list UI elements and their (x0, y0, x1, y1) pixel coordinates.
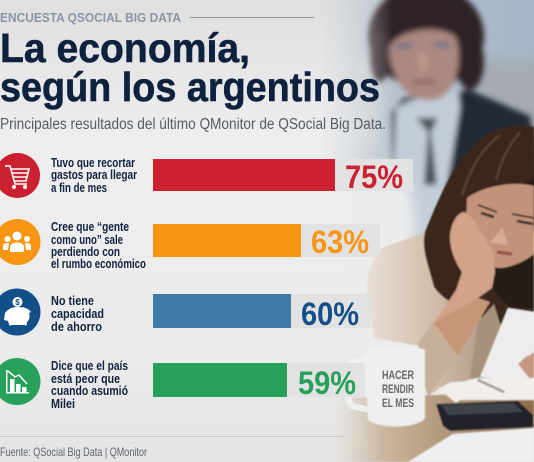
row 1: recortar gastos (0, 153, 413, 198)
row 3: sin ahorro (0, 288, 370, 336)
photo: blurred man in suit (336, 0, 534, 237)
icon: piggy bank: $ (15, 298, 20, 307)
label: gastos para llegar (51, 167, 137, 182)
label: perdiendo con (51, 244, 120, 259)
sweater neckline (470, 304, 534, 380)
bar 59% (153, 363, 364, 401)
icon: shopping cart (0, 153, 40, 198)
icon: people (0, 219, 40, 265)
row 4: peor que cuando asumió Milei (0, 358, 364, 411)
shirt (392, 90, 460, 240)
label: Tuvo que recortar (51, 155, 135, 170)
photo: worried woman with bills (335, 125, 534, 462)
bar 75% (153, 159, 413, 195)
bar 75%: 75% (345, 159, 403, 195)
label: el rumbo económico (51, 256, 146, 271)
label: Cree que “gente (51, 219, 129, 234)
calculator (436, 401, 533, 431)
bar 63% (153, 224, 380, 260)
paper (480, 308, 534, 382)
hair (424, 125, 534, 330)
row 2: gente como uno (0, 219, 380, 271)
label: capacidad (51, 306, 104, 321)
sleeve (418, 322, 458, 396)
title: La economía, (0, 25, 250, 71)
label: Milei (51, 396, 75, 411)
label (51, 155, 137, 195)
eyes (394, 43, 414, 49)
label: está peor que (51, 371, 120, 386)
label: como uno” sale (51, 232, 123, 247)
label (51, 358, 128, 411)
bar 60% (153, 294, 370, 332)
icon: piggy bank (0, 288, 40, 336)
label: a fin de mes (51, 180, 107, 195)
hand and forearm (434, 212, 495, 323)
mug: HACER RENDIR EL MES: HACER (382, 368, 414, 382)
hand on paper (518, 352, 534, 384)
bar 63%: 63% (311, 224, 369, 260)
notebook (438, 378, 534, 403)
tie (416, 118, 438, 185)
hair (368, 0, 484, 88)
label (51, 219, 146, 271)
label: No tiene (51, 293, 94, 308)
bottom papers (408, 428, 534, 462)
table (335, 392, 534, 462)
label: cuando asumió (51, 383, 128, 398)
soft wash beside results (355, 165, 415, 285)
sweater (367, 233, 534, 396)
bar 60%: 60% (301, 296, 359, 332)
mug: HACER RENDIR EL MES: EL MES (382, 396, 414, 410)
label (51, 293, 104, 334)
face (466, 184, 534, 268)
mug: HACER RENDIR EL MES: RENDIR (382, 382, 414, 396)
label: de ahorro (51, 319, 102, 334)
mug: HACER RENDIR EL MES (347, 346, 425, 427)
suit (392, 90, 534, 230)
face (390, 30, 459, 100)
icon: falling chart (0, 358, 40, 405)
kicker: ENCUESTA QSOCIAL BIG DATA (0, 10, 182, 25)
subtitle: Principales resultados del último QMonitor de QSocial Big Data. (0, 116, 386, 133)
title (0, 25, 380, 110)
title: según los argentinos (0, 64, 380, 110)
bar 59%: 59% (298, 365, 356, 401)
source footer: Fuente: QSocial Big Data | QMonitor (0, 445, 147, 459)
label: Dice que el país (51, 358, 128, 373)
